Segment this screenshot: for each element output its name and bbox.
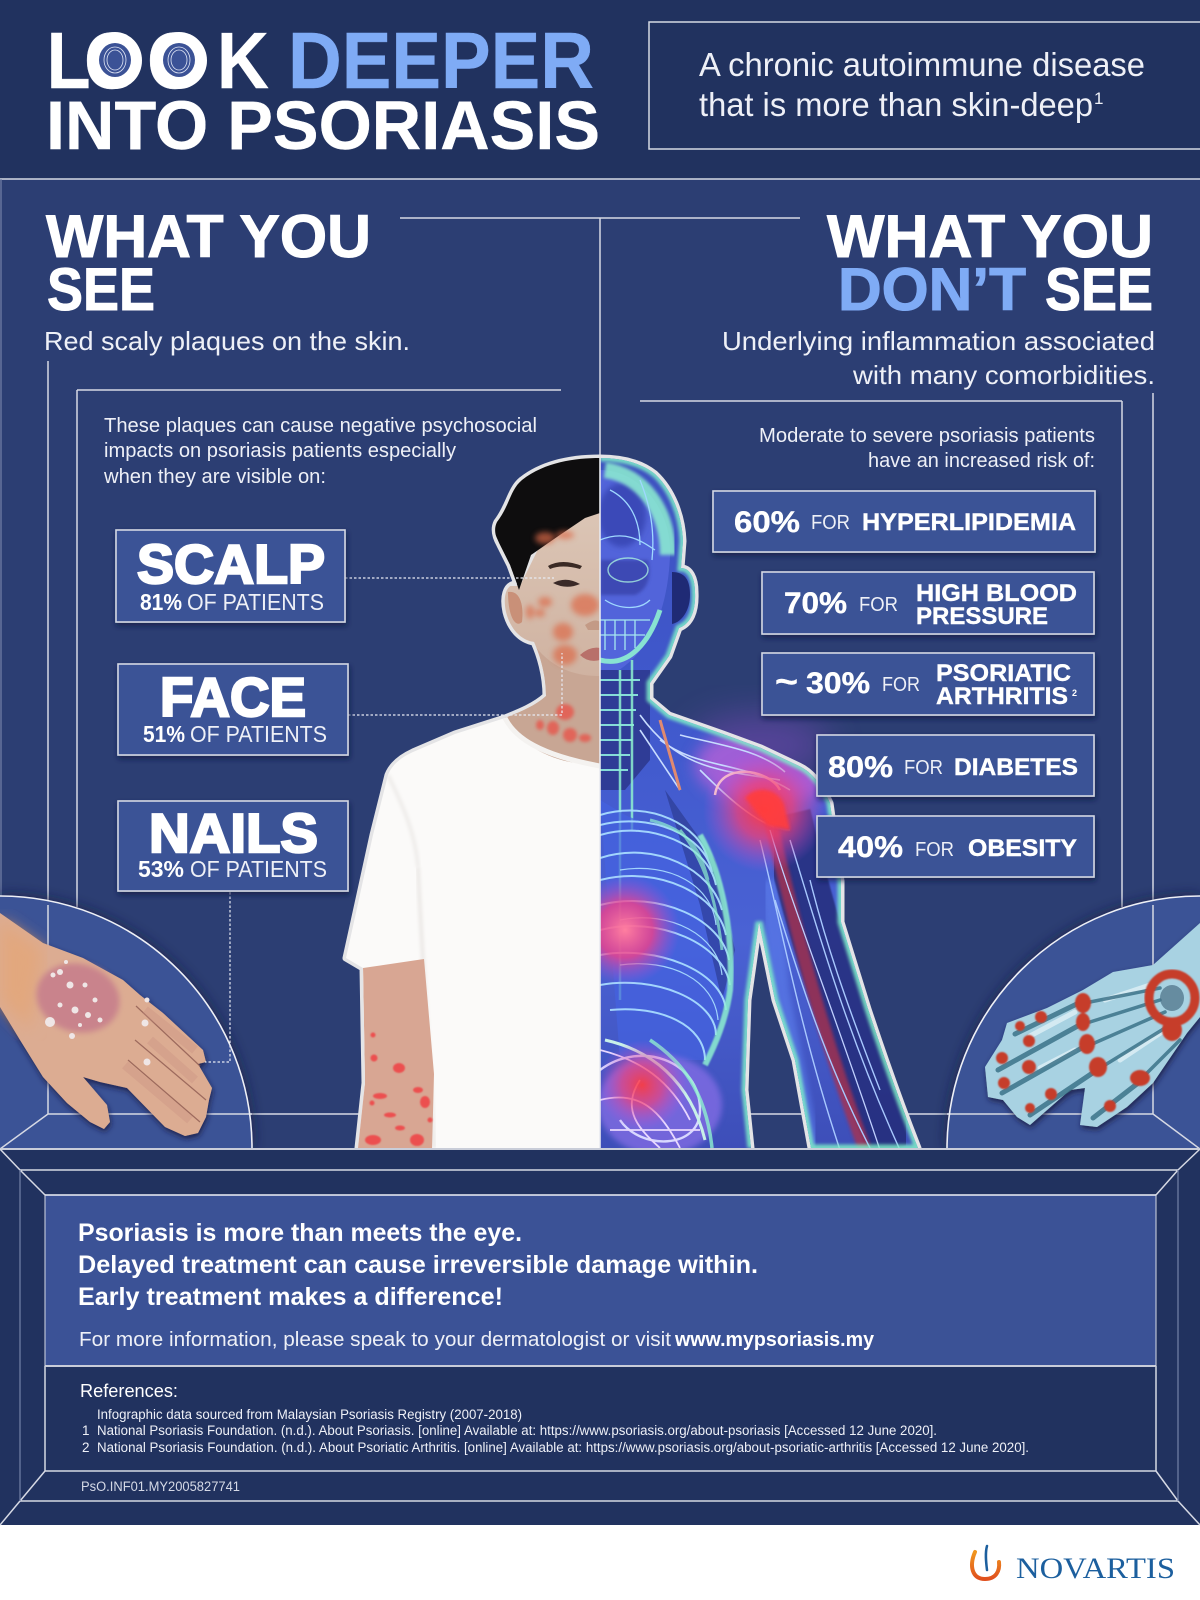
stat: diabetes [817,735,1094,796]
panel: what you see heading [44,203,410,356]
card: face: OF PATIENTS [190,721,327,747]
text block: psychosocial impacts: when they are visible on: [103,466,326,488]
left half: man with psoriasis [340,450,600,1150]
text block: psychosocial impacts [103,415,537,488]
body rim glow [600,458,918,1148]
body base [600,450,930,1150]
panel: what you don't see heading: with many comorbidities. [852,360,1155,390]
stat: obesity: OBESITY [968,835,1077,862]
shoulder glow behind figure [690,715,830,775]
stat: obesity: FOR [915,839,954,861]
references: Infographic data sourced from Malaysian Psoriasis Registry (2007-2018) [97,1407,522,1422]
references: National Psoriasis Foundation. (n.d.). About Psoriatic Arthritis. [online] Available at: https://www.psoriasis.org/about-psoriatic-arthritis [Accessed 12 June 2020]. [97,1440,1029,1455]
skull [598,470,670,680]
card: face: 51% [143,721,185,747]
connector: face [348,653,562,715]
panel: what you don't see heading: Underlying inflammation associated [722,326,1155,356]
callout: key message: For more information, please speak to your dermatologist or visit [79,1329,671,1351]
stat: high blood pressure [762,572,1094,634]
title: LOOK [47,17,269,106]
icon: hand with plaques [0,913,212,1136]
stat: hyperlipidemia [713,491,1095,552]
facial and neck plaques [526,531,599,665]
card: scalp: OF PATIENTS [187,589,324,615]
panel: what you see heading: Red scaly plaques on the skin. [44,326,410,356]
panel: what you see heading: SEE [47,256,155,323]
document code: PsO.INF01.MY2005827741 [81,1479,240,1494]
stat: obesity: 40% [838,831,903,864]
stat: diabetes: 80% [828,751,893,784]
shoulder joint [745,790,790,830]
panel: what you don't see heading: WHAT YOU [827,203,1153,270]
arm bones and muscles [760,815,900,1150]
subtitle callout: 1 [1094,89,1103,108]
face features [548,562,582,569]
frame lines of main panel [0,179,1200,1149]
stat: diabetes: FOR [904,757,943,779]
collar and shoulder lines [640,715,790,830]
subtitle callout [649,22,1200,149]
card: scalp: SCALP [137,533,325,595]
stat: high blood pressure: HIGH BLOOD [916,580,1077,607]
figure halo outline [346,458,918,1148]
card: face [118,664,348,755]
connector: scalp [345,577,554,579]
left quarter panel: psoriasis hand [0,896,252,1149]
stat: hyperlipidemia: 60% [734,506,800,539]
hair [492,450,600,590]
icon: x-ray hand with inflamed joints [985,923,1200,1127]
header band [0,0,1200,179]
stat: hyperlipidemia: FOR [811,512,850,534]
card: nails: NAILS [149,802,318,864]
card: scalp [116,530,345,622]
title: INTO PSORIASIS [46,87,600,164]
stat: psoriatic arthritis: ARTHRITIS [936,683,1068,710]
card: scalp: 81% [140,589,182,615]
icon: eye in first O [88,32,142,89]
stat: diabetes: DIABETES [954,754,1078,781]
panel: what you don't see heading: SEE [1045,256,1153,323]
references: 2 [82,1440,90,1455]
callout: key message [45,1195,1156,1366]
callout: key message: Psoriasis is more than meets the eye. [78,1219,522,1247]
inflammation glows [706,752,824,869]
footer band [0,1149,1200,1525]
text block: increased risk: Moderate to severe psoriasis patients [759,425,1095,447]
stat: high blood pressure: PRESSURE [916,603,1048,630]
ear [672,572,690,624]
connector: nails [205,892,230,1062]
references: References: [80,1381,178,1401]
right quarter panel: arthritic hand x-ray [947,896,1200,1149]
subtitle callout: A chronic autoimmune disease [699,46,1145,83]
text block: increased risk: have an increased risk of: [868,450,1095,472]
central figure: half man, half x-ray anatomy [340,450,930,1155]
stat: psoriatic arthritis: FOR [882,674,920,696]
stat: psoriatic arthritis [762,653,1094,715]
logo: novartis [972,1546,1175,1585]
card: nails [118,801,348,891]
panel: what you don't see heading: DON’T [838,256,1026,323]
rib cage [600,790,735,1065]
stat: psoriatic arthritis: PSORIATIC [936,660,1071,687]
ear [508,592,522,624]
stat: hyperlipidemia: HYPERLIPIDEMIA [862,509,1076,536]
centre divider [599,458,601,1148]
references: 1 [82,1423,90,1438]
neck and face skin [500,505,600,766]
text block: psychosocial impacts: impacts on psoriasis patients especially [104,440,456,462]
main panel background [0,179,1200,1149]
text block: increased risk [759,425,1095,472]
t-shirt [340,700,600,1150]
stat: high blood pressure: 70% [784,587,847,620]
card: face: FACE [160,666,306,728]
references [80,1381,1029,1455]
icon: eye in second O [151,32,207,89]
card: nails: 53% [138,856,184,882]
panel: what you don't see heading [722,203,1155,390]
title [46,16,600,164]
title: DEEPER [288,16,594,105]
logo: novartis: NOVARTIS [1016,1552,1175,1585]
callout: key message: Early treatment makes a difference! [78,1283,503,1311]
stat: psoriatic arthritis: ~ [775,663,798,701]
callout: key message: www.mypsoriasis.my [674,1329,875,1351]
stat: high blood pressure: FOR [859,594,898,616]
card: nails: OF PATIENTS [190,856,327,882]
icon: novartis flame [972,1546,999,1579]
stat: psoriatic arthritis: 30% [806,667,870,700]
forearm with lesions [355,959,434,1150]
right half: x-ray anatomy [600,458,918,1148]
collar [505,718,600,766]
panel: what you see heading: WHAT YOU [46,203,371,270]
stat: obesity [817,816,1094,877]
subtitle callout: that is more than skin-deep [699,86,1093,123]
references: National Psoriasis Foundation. (n.d.). About Psoriasis. [online] Available at: https://www.psoriasis.org/about-psoriasis [Accessed 12 June 2020]. [97,1423,937,1438]
text block: psychosocial impacts: These plaques can cause negative psychosocial [104,415,537,437]
stat: psoriatic arthritis: 2 [1072,688,1077,698]
organs and abdomen [598,1040,722,1155]
callout: key message: Delayed treatment can cause irreversible damage within. [78,1251,758,1279]
neck and spine [600,660,650,1000]
